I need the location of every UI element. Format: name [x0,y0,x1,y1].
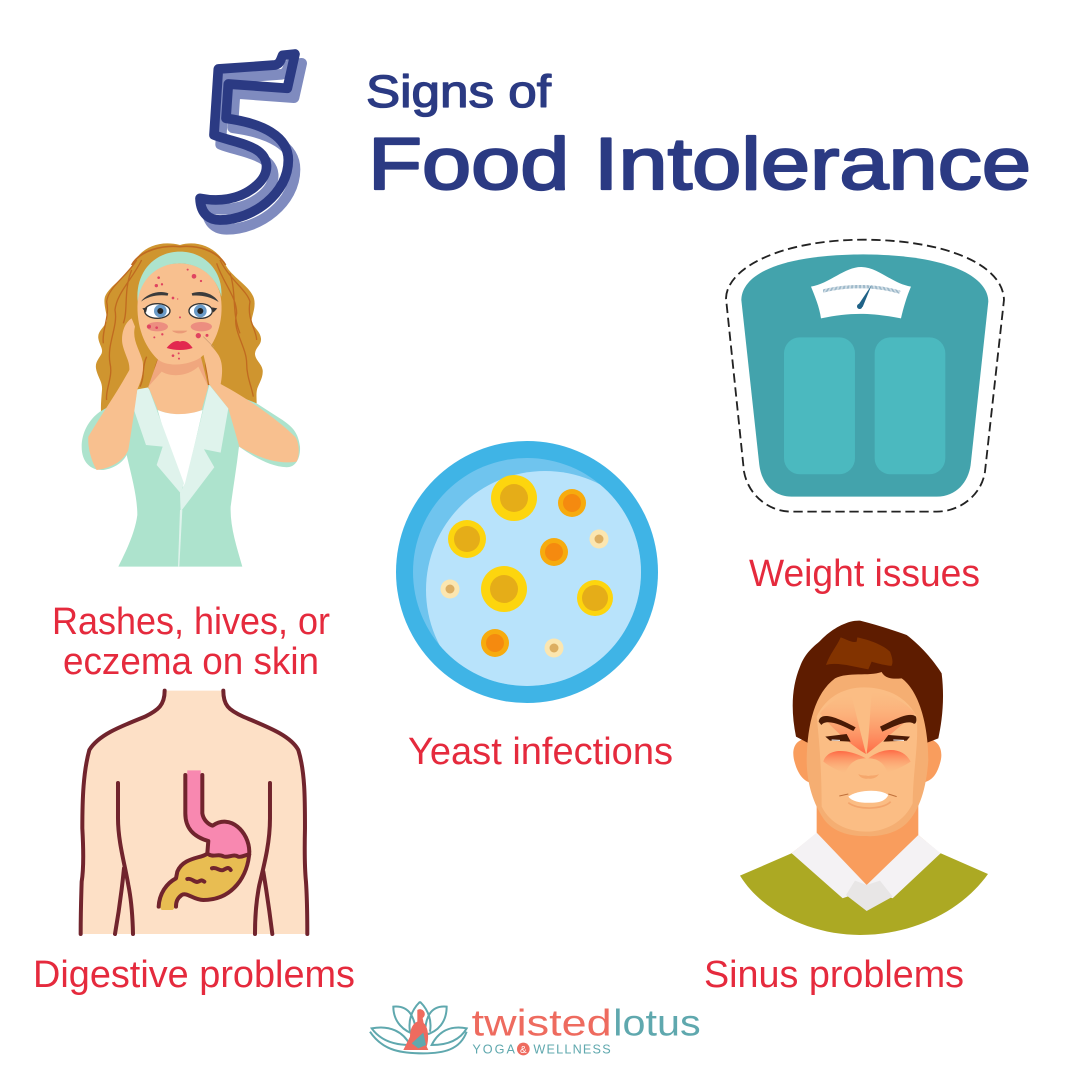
shirt [158,410,203,487]
ears [793,738,941,783]
stomach [185,770,249,855]
label: yeast: Yeast infections [408,731,673,773]
label: weight: Weight issues [749,553,980,595]
label: sinus: Sinus problems [704,954,964,996]
illustration: woman with rash [82,243,300,567]
hands and arms [88,318,143,470]
logo: YOGA [472,1042,516,1056]
illustration: yeast dish [396,441,664,709]
lotus mark [370,1002,467,1053]
face [137,263,222,364]
wordmark: twisted [472,1003,612,1044]
nose [858,774,879,779]
meditating figure [403,1009,428,1050]
logo: WELLNESS [533,1042,611,1056]
spots [147,269,208,360]
hair [96,243,263,412]
jacket [82,385,300,567]
label: rashes [52,601,330,683]
blush [147,322,168,331]
label: rashes: Rashes, hives, or [52,601,330,643]
label: digestive: Digestive problems [33,954,355,996]
logo [370,1002,701,1056]
mouth [848,791,888,803]
title: Signs of [366,66,552,117]
title: Food Intolerance [368,124,1031,205]
brows and eyes [819,715,916,732]
illustration: weighing scale [726,240,1004,512]
label: rashes: eczema on skin [63,641,319,683]
neck [792,797,940,885]
dial [811,267,911,318]
sweater [740,853,988,935]
logo: lotus [613,1003,701,1044]
face [807,672,928,836]
numeral 5 [200,54,302,229]
nose and mouth [172,331,187,333]
headband [137,252,221,302]
illustration: torso with stomach [81,691,308,934]
logo: & [520,1045,527,1056]
sinus inflammation [820,696,866,754]
lapels [134,387,184,493]
eyebrows [141,292,219,302]
eyes [145,304,170,318]
neck [148,353,208,387]
title [366,66,1031,205]
collar [792,833,941,898]
illustration: man with sinus pain [740,621,988,935]
hair [793,621,943,750]
